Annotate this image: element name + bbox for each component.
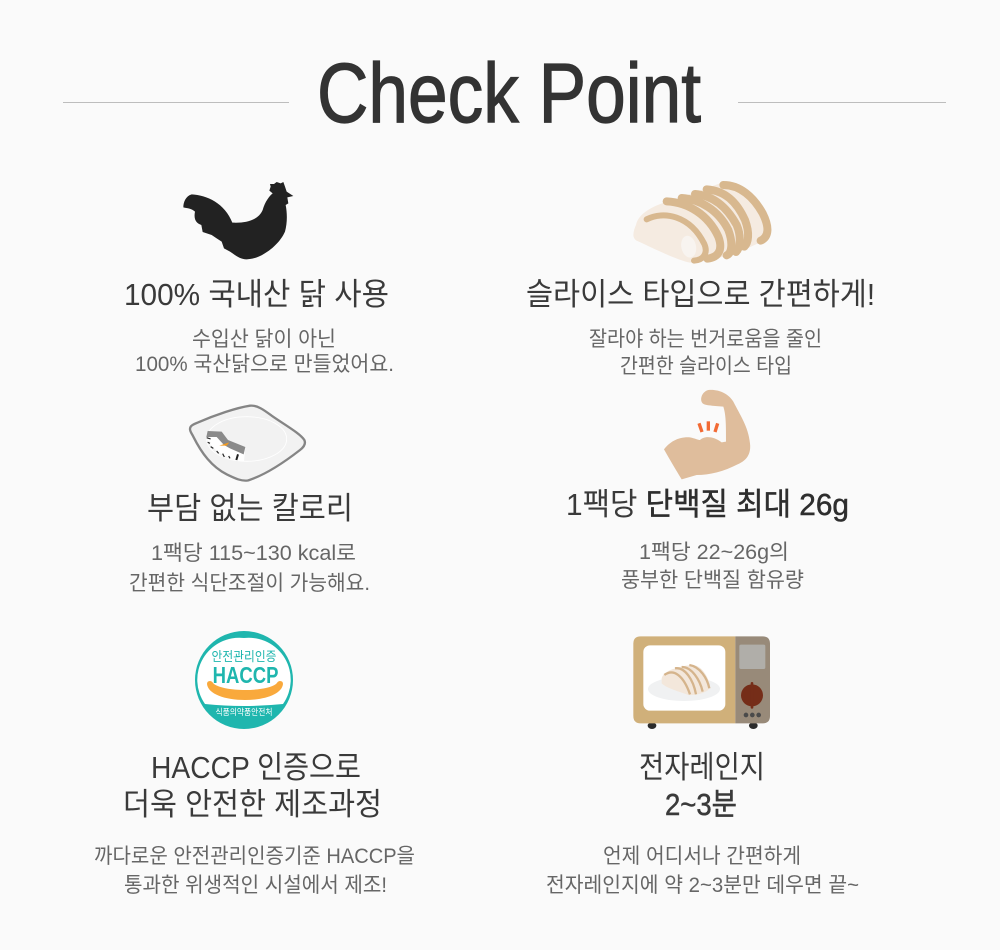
icon: chicken (183, 182, 293, 259)
icon: weighing scale (190, 406, 305, 481)
heading: 전자레인지 (639, 750, 765, 785)
panel: protein (566, 390, 849, 592)
heading: 100% 국내산 닭 사용 (124, 277, 389, 312)
icon: flexed arm (664, 390, 750, 479)
description (94, 845, 415, 897)
description: 수입산 닭이 아닌 (192, 328, 336, 351)
icon: HACCP badge: HACCP (213, 663, 278, 689)
heading: 슬라이스 타입으로 간편하게! (526, 277, 875, 312)
panel: domestic chicken (124, 182, 394, 376)
description (621, 541, 804, 592)
description: 통과한 위생적인 시설에서 제조! (124, 874, 387, 897)
description: 잘라야 하는 번거로움을 줄인 (589, 328, 822, 351)
heading: 부담 없는 칼로리 (147, 491, 353, 526)
heading (639, 750, 765, 822)
description (135, 328, 394, 376)
heading: HACCP 인증으로 (151, 750, 361, 785)
heading (123, 750, 382, 822)
description (129, 542, 370, 595)
description: 까다로운 안전관리인증기준 HACCP을 (94, 845, 415, 868)
description: 100% 국산닭으로 만들었어요. (135, 353, 394, 376)
title: Check Point (317, 46, 701, 140)
description: 간편한 식단조절이 가능해요. (129, 572, 370, 595)
panel: microwave (546, 636, 859, 897)
panel: low calorie (129, 406, 370, 595)
description (546, 845, 859, 897)
icon: HACCP badge: 식품의약품안전처 (216, 707, 272, 717)
icon: microwave (633, 636, 770, 729)
panel: HACCP (94, 631, 415, 897)
heading: 2~3분 (665, 787, 737, 822)
description (589, 328, 822, 378)
description: 풍부한 단백질 함유량 (621, 569, 804, 592)
description: 간편한 슬라이스 타입 (620, 355, 792, 378)
description: 언제 어디서나 간편하게 (603, 845, 801, 868)
description: 1팩당 115~130 kcal로 (151, 542, 356, 565)
description: 전자레인지에 약 2~3분만 데우면 끝~ (546, 874, 859, 897)
heading: 더욱 안전한 제조과정 (123, 787, 382, 822)
description: 1팩당 22~26g의 (639, 541, 789, 564)
icon: sliced chicken (633, 183, 771, 263)
icon: HACCP badge (195, 631, 293, 729)
icon: HACCP badge: 안전관리인증 (212, 649, 277, 664)
heading: 1팩당 단백질 최대 26g (566, 487, 849, 522)
panel: sliced type (526, 183, 875, 378)
